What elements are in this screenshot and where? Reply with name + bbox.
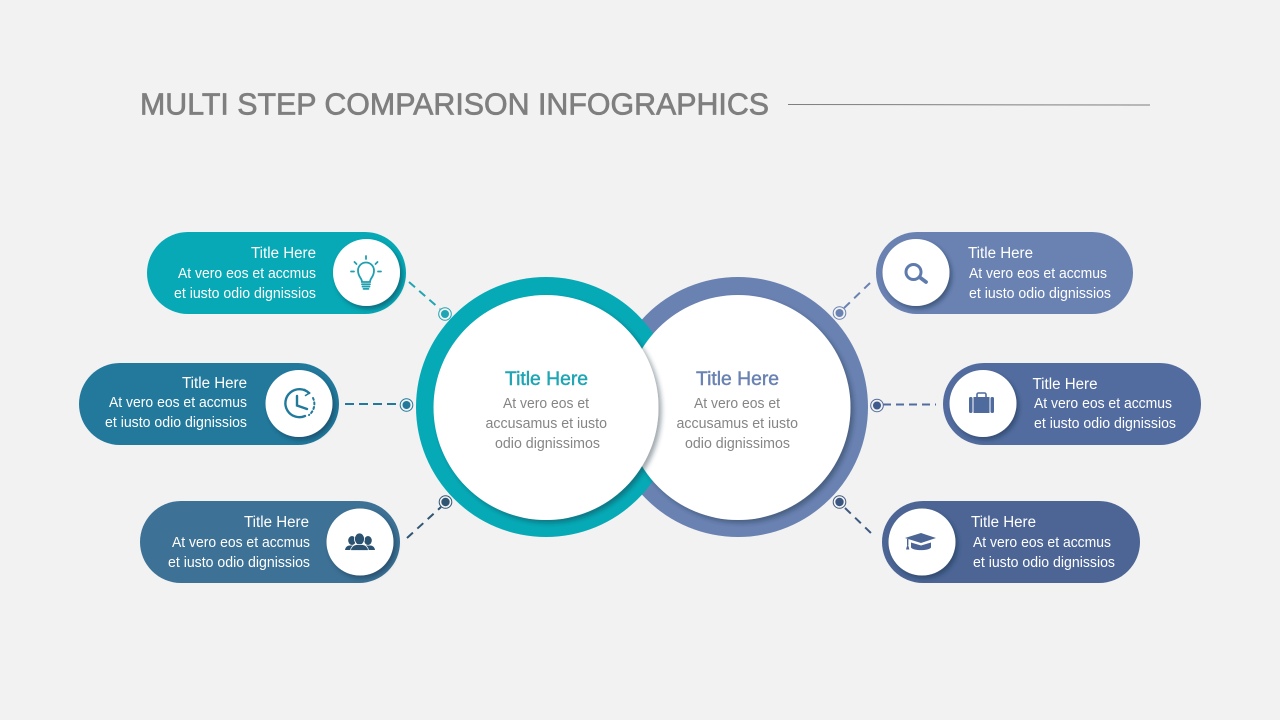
text: bottom left: At vero eos et accmus — [172, 535, 310, 551]
right inner circle — [626, 295, 850, 520]
comparison circles — [416, 277, 868, 537]
right circle text: accusamus et iusto — [676, 416, 798, 432]
text: top left — [174, 245, 316, 302]
text: middle right: et iusto odio dignissios — [1034, 416, 1176, 432]
text: top right — [968, 245, 1111, 302]
text: middle left: et iusto odio dignissios — [105, 415, 247, 431]
panel: middle right pill — [943, 363, 1201, 445]
text: middle left: At vero eos et accmus — [109, 395, 247, 411]
left inner circle — [434, 295, 658, 520]
connector: top right — [833, 283, 870, 319]
right circle text: odio dignissimos — [685, 436, 790, 452]
left circle text: odio dignissimos — [495, 436, 600, 452]
panel: bottom left pill — [140, 501, 400, 583]
text: bottom right — [971, 514, 1115, 571]
panel: top left pill — [147, 232, 406, 314]
connector: middle right — [871, 399, 936, 412]
connector: bottom left — [407, 496, 452, 538]
left circle text: Title Here — [505, 369, 588, 390]
icon: people — [345, 533, 375, 550]
left outer ring — [416, 277, 676, 537]
icon: magnifier — [906, 264, 926, 282]
text: top right: At vero eos et accmus — [969, 266, 1107, 282]
text: top left: At vero eos et accmus — [178, 266, 316, 282]
text: middle right: Title Here — [1032, 376, 1098, 393]
connector: bottom right — [833, 496, 872, 534]
text: bottom right: et iusto odio dignissios — [973, 555, 1115, 571]
right circle text: Title Here — [696, 369, 779, 390]
right circle text — [676, 369, 798, 452]
text: top right: et iusto odio dignissios — [969, 286, 1111, 302]
connector: top left — [409, 282, 451, 320]
title: MULTI STEP COMPARISON INFOGRAPHICS — [140, 86, 769, 122]
panel: top right pill — [876, 232, 1133, 314]
text: middle left — [105, 375, 247, 431]
icon: graduation cap — [905, 533, 936, 550]
icon: briefcase — [969, 393, 994, 413]
text: middle left: Title Here — [182, 375, 247, 392]
text: middle right: At vero eos et accmus — [1034, 396, 1172, 412]
connector: middle left — [345, 399, 413, 411]
left circle text: At vero eos et — [503, 396, 589, 412]
text: middle right — [1032, 376, 1176, 432]
text: top left: Title Here — [251, 245, 316, 262]
left circle text: accusamus et iusto — [486, 416, 607, 432]
text: bottom right: Title Here — [971, 514, 1036, 531]
right outer ring — [608, 277, 868, 537]
icon: light bulb — [351, 256, 381, 289]
panel: bottom right pill — [882, 501, 1140, 583]
text: bottom left: Title Here — [244, 514, 309, 531]
text: bottom right: At vero eos et accmus — [973, 535, 1111, 551]
left circle text — [486, 369, 607, 452]
icon: clock — [285, 389, 314, 417]
panel: middle left pill — [79, 363, 339, 445]
text: bottom left — [168, 514, 310, 571]
text: top right: Title Here — [968, 245, 1033, 262]
text: bottom left: et iusto odio dignissios — [168, 555, 310, 571]
right circle text: At vero eos et — [694, 396, 780, 412]
text: top left: et iusto odio dignissios — [174, 286, 316, 302]
